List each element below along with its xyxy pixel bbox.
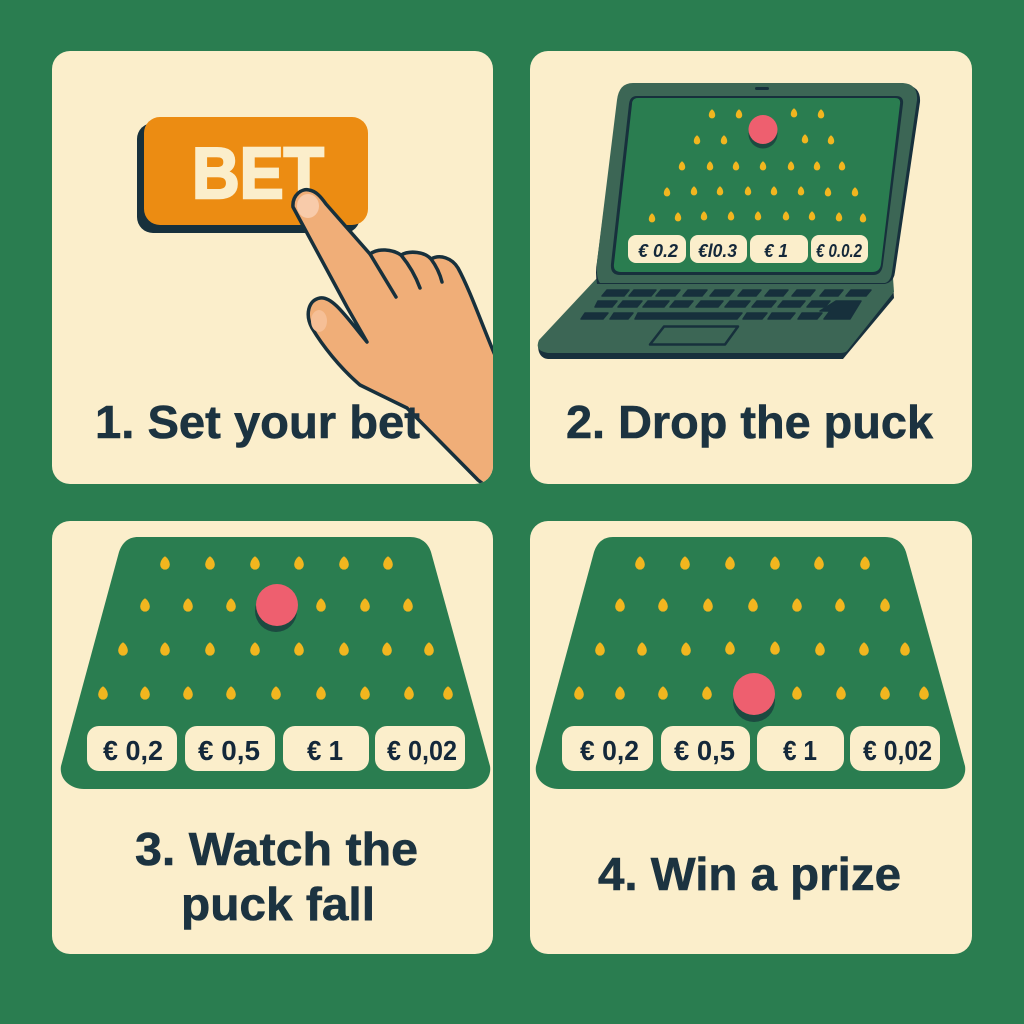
panel: step 4 win a prize [530, 521, 972, 954]
heading: step 3 [135, 823, 418, 930]
prize chips [562, 726, 940, 771]
laptop lid [596, 83, 920, 284]
heading: step 1: 1. Set your bet [95, 396, 420, 448]
icon: BET button [137, 117, 368, 233]
heading: step 2: 2. Drop the puck [566, 396, 933, 448]
prize chips: € 0,2 [103, 735, 163, 766]
prize chips: € 0,02 [863, 735, 932, 766]
prize chips [87, 726, 465, 771]
pegs [574, 556, 929, 700]
puck [733, 673, 775, 722]
laptop prize chips [628, 235, 868, 263]
laptop prize chips: €l0.3 [698, 241, 737, 261]
board: peg board trapezoid [536, 537, 965, 789]
pegs [98, 556, 453, 700]
heading: step 3: 3. Watch the [135, 823, 418, 875]
prize chips: € 0,2 [580, 735, 639, 766]
icon: pointing hand [293, 190, 497, 495]
board: peg board trapezoid [61, 537, 490, 789]
laptop prize chips: € 0.0.2 [816, 241, 862, 261]
laptop prize chips: € 1 [764, 241, 788, 261]
prize chips: € 1 [783, 735, 817, 766]
prize chips: € 0,02 [387, 735, 457, 766]
laptop screen [611, 96, 903, 275]
icon: laptop [538, 83, 920, 359]
panel: step 3 watch the puck fall [52, 521, 493, 954]
laptop base [538, 278, 894, 359]
prize chips: € 0,5 [198, 735, 260, 766]
laptop prize chips: € 0.2 [638, 241, 678, 261]
laptop pegs [649, 108, 866, 222]
prize chips: € 1 [307, 735, 343, 766]
puck [255, 584, 298, 632]
panel: step 1 set your bet [52, 51, 497, 495]
icon: BET button: BET [192, 134, 324, 214]
panel: step 2 drop the puck [530, 51, 972, 484]
heading: step 3: puck fall [181, 878, 375, 930]
heading: step 4: 4. Win a prize [598, 848, 901, 900]
laptop puck [748, 115, 778, 148]
prize chips: € 0,5 [674, 735, 735, 766]
